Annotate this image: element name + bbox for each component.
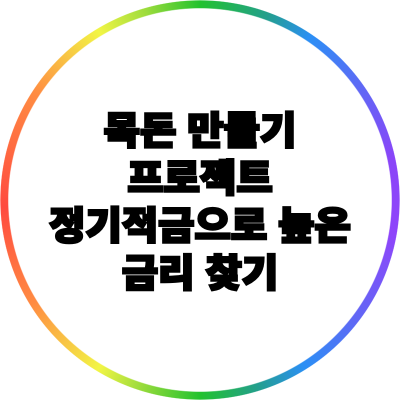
title line 4: 금리 찾기	[122, 253, 278, 295]
title line 2: 프로젝트	[127, 158, 273, 200]
title line 1: 목돈 만들기	[104, 111, 296, 153]
title line 3: 정기적금으로 높은	[49, 206, 351, 248]
